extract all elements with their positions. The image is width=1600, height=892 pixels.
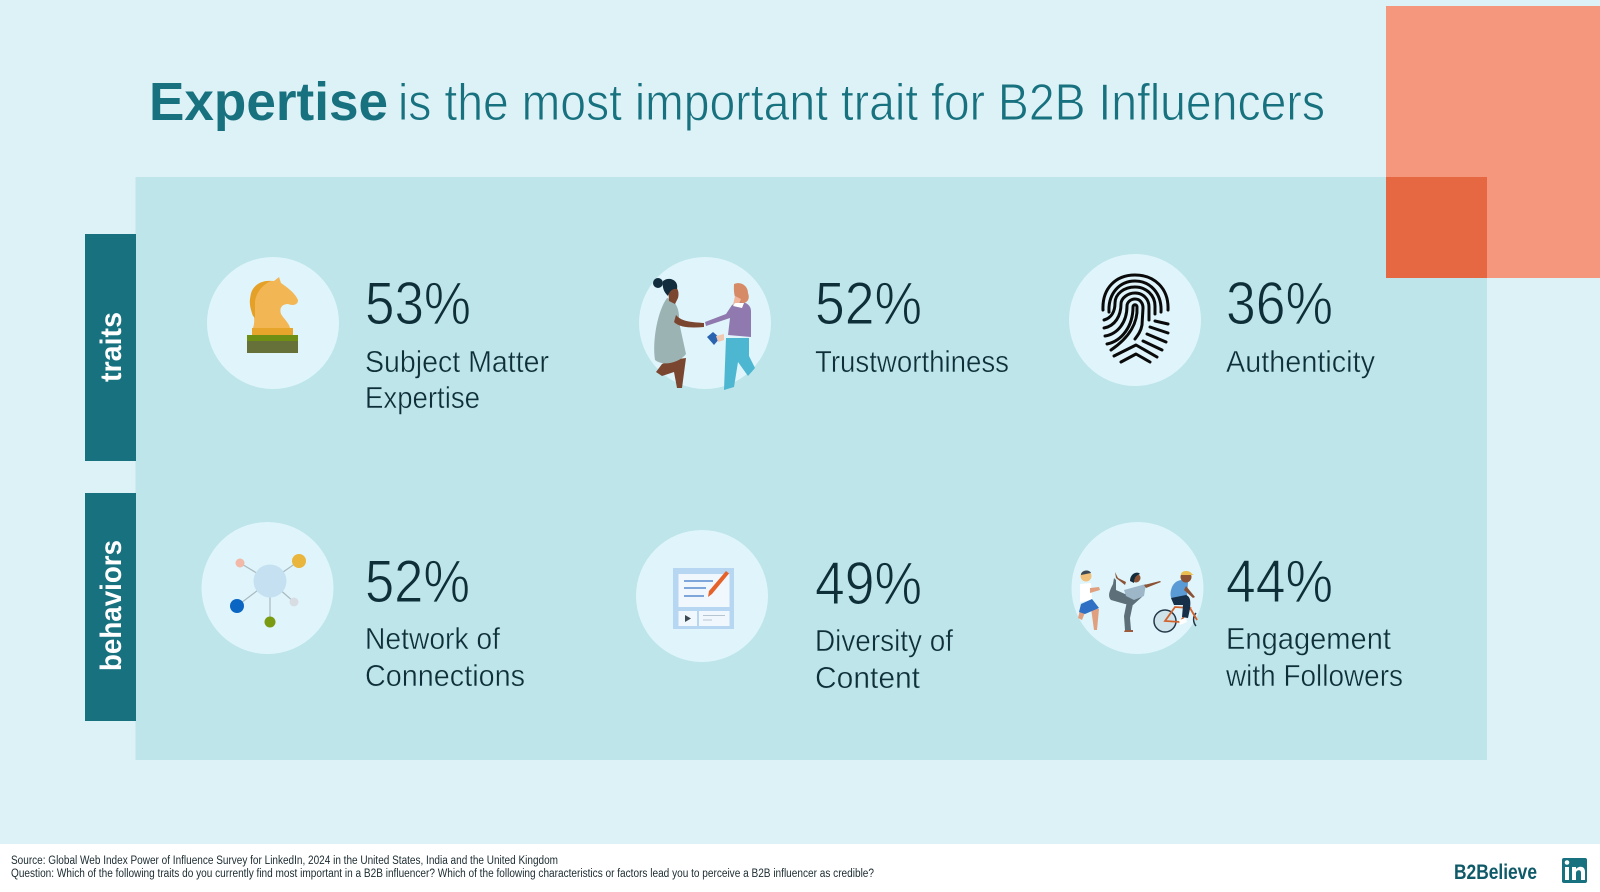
stat: diversity of content: Diversity of	[815, 623, 953, 658]
panel: main stats	[136, 177, 1487, 760]
stat: network of connections	[365, 548, 525, 693]
icon: chess knight	[207, 257, 339, 389]
stat: trustworthiness: Trustworthiness	[815, 344, 1009, 379]
logo: LinkedIn	[1562, 858, 1587, 883]
title	[149, 72, 1325, 132]
stat: authenticity	[1226, 270, 1375, 379]
logo: B2Believe: B2Believe	[1454, 861, 1537, 884]
stat: network of connections: Network of	[365, 621, 500, 656]
source note	[11, 855, 874, 880]
stat: trustworthiness: 52%	[815, 270, 922, 337]
tab: behaviors	[85, 493, 136, 721]
stat: authenticity: 36%	[1226, 270, 1333, 337]
stat: subject matter expertise: Expertise	[365, 380, 480, 415]
tab: traits	[85, 234, 136, 461]
stat: diversity of content: 49%	[815, 550, 922, 617]
title: Expertise	[149, 72, 388, 132]
stat: trustworthiness	[815, 270, 1009, 379]
icon: fingerprint	[1069, 254, 1201, 386]
stat: diversity of content	[815, 550, 953, 695]
title: is the most important trait for B2B Influencers	[398, 74, 1325, 132]
stat: diversity of content: Content	[815, 660, 920, 695]
stat: engagement with followers: Engagement	[1226, 621, 1391, 656]
coral overlap square	[1386, 177, 1487, 278]
tab: traits: traits	[95, 312, 128, 382]
footer bar	[0, 844, 1600, 892]
icon: network	[202, 522, 334, 654]
stat: authenticity: Authenticity	[1226, 344, 1375, 379]
stat: network of connections: Connections	[365, 658, 525, 693]
icon: active people	[1072, 522, 1204, 654]
decorative coral square	[1386, 6, 1600, 278]
stat: engagement with followers	[1225, 548, 1403, 693]
stat: subject matter expertise: Subject Matter	[365, 344, 549, 379]
source note: Source: Global Web Index Power of Influence Survey for LinkedIn, 2024 in the United States, India and the United Kingdom	[11, 855, 558, 867]
stat: engagement with followers: 44%	[1226, 548, 1333, 615]
stat: network of connections: 52%	[365, 548, 470, 615]
icon: content document	[636, 530, 768, 662]
stat: subject matter expertise	[365, 270, 549, 415]
icon: handshake	[639, 257, 771, 390]
tab: behaviors: behaviors	[95, 540, 128, 671]
stat: subject matter expertise: 53%	[365, 270, 471, 337]
source note: Question: Which of the following traits do you currently find most important in a B2B influencer? Which of the following characteristics or factors lead you to perceive a B2B influencer as credible?	[11, 868, 874, 880]
stat: engagement with followers: with Followers	[1225, 658, 1403, 693]
